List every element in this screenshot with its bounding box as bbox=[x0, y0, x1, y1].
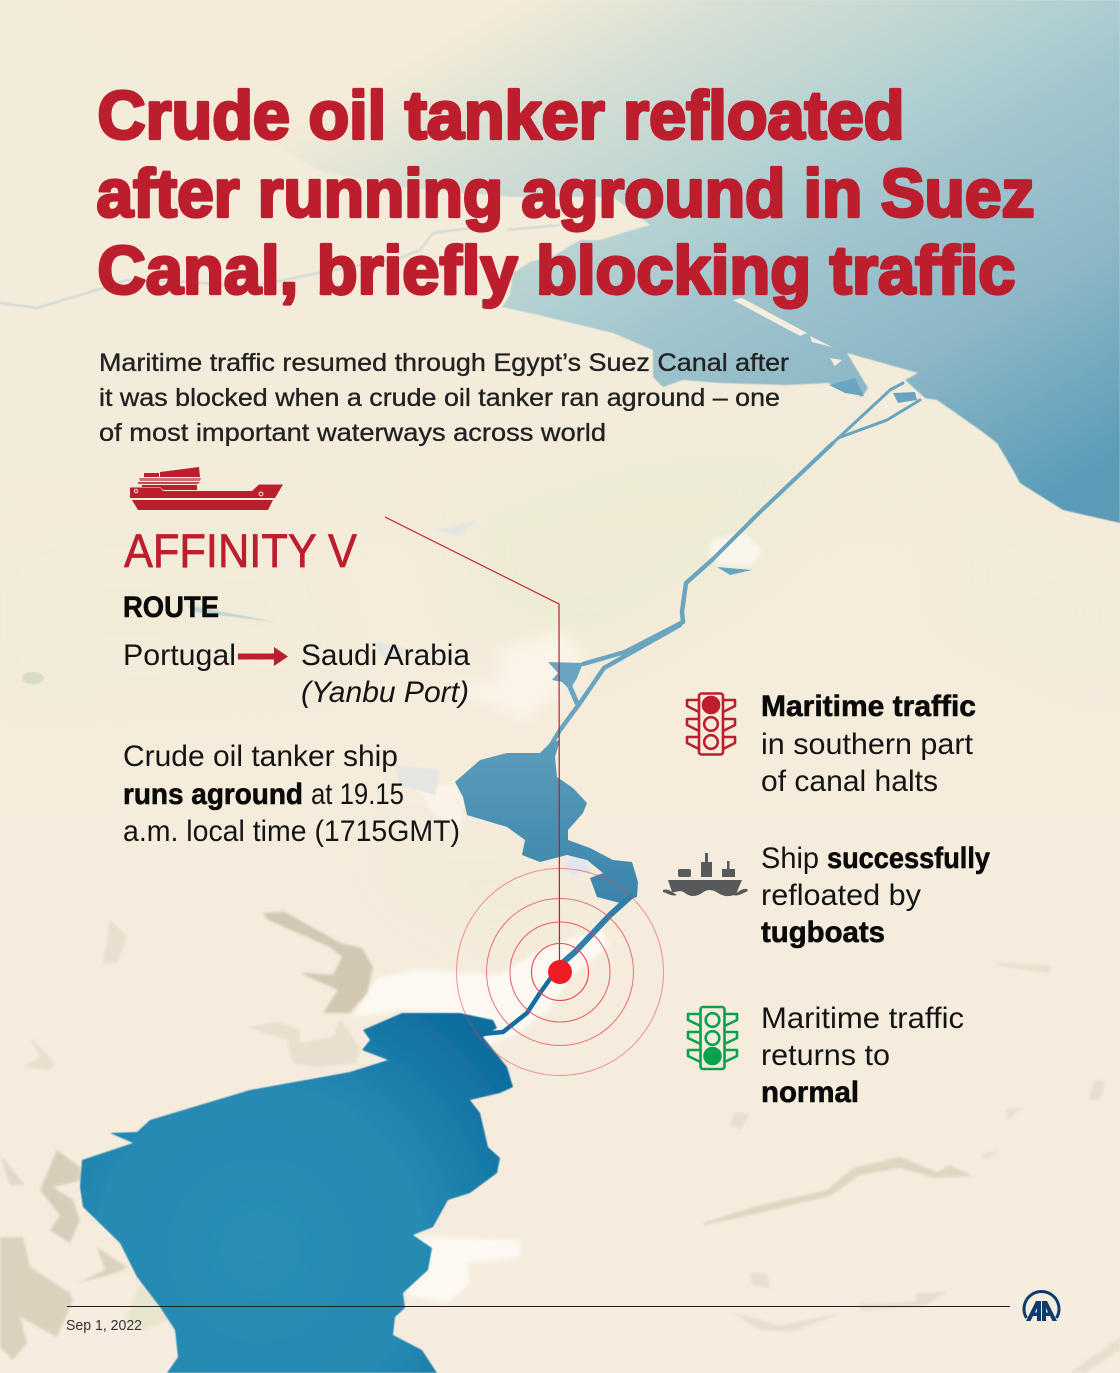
great bitter lake bbox=[455, 740, 638, 903]
red light text: of canal halts bbox=[761, 765, 938, 798]
green light text: normal bbox=[761, 1076, 859, 1109]
grounding description: runs aground bbox=[123, 778, 303, 811]
callout leader line bbox=[385, 517, 560, 972]
title: Crude oil tanker refloated bbox=[98, 78, 904, 154]
subtitle text: Maritime traffic resumed through Egypt’s Suez Canal after bbox=[99, 349, 789, 377]
red light text: Maritime traffic bbox=[761, 690, 976, 723]
inland lagoons bbox=[22, 520, 592, 875]
footer rule bbox=[67, 1306, 1010, 1307]
suez canal south section bbox=[482, 897, 630, 1034]
grounding description: a.m. local time (1715GMT) bbox=[123, 815, 460, 848]
refloated text: successfully bbox=[827, 842, 990, 875]
icon: crude oil tanker bbox=[130, 467, 283, 510]
subtitle text bbox=[99, 349, 789, 447]
nile delta branches bbox=[0, 225, 560, 308]
red light text: in southern part bbox=[761, 728, 974, 761]
subtitle text: it was blocked when a crude oil tanker ran aground – one bbox=[99, 384, 780, 412]
sandbar barrier bbox=[733, 298, 842, 366]
grounding description: Crude oil tanker ship bbox=[123, 740, 398, 773]
grounding description: at 19.15 bbox=[311, 778, 404, 811]
gulf of suez bbox=[80, 1013, 513, 1373]
title bbox=[96, 78, 1034, 308]
refloated text: tugboats bbox=[761, 916, 885, 949]
route: origin: Portugal bbox=[123, 639, 236, 672]
icon: tugboat bbox=[663, 853, 748, 896]
subtitle text: of most important waterways across world bbox=[99, 419, 606, 447]
title: Canal, briefly blocking traffic bbox=[98, 232, 1016, 308]
green light text: Maritime traffic bbox=[761, 1002, 964, 1035]
icon: red traffic light bbox=[687, 694, 735, 754]
icon: green traffic light bbox=[688, 1007, 737, 1069]
green light text: returns to bbox=[761, 1039, 890, 1072]
land: pale desert patches bbox=[353, 533, 762, 1303]
red light text bbox=[761, 690, 976, 798]
logo: Anadolu Agency bbox=[1024, 1291, 1059, 1321]
title: after running aground in Suez bbox=[96, 156, 1034, 232]
grounding description bbox=[123, 740, 460, 848]
route: destination bbox=[301, 639, 470, 709]
green light text bbox=[761, 1002, 964, 1109]
refloated text bbox=[761, 842, 990, 949]
land: green vegetation patches bbox=[0, 430, 1120, 960]
refloated text: Ship bbox=[761, 842, 819, 875]
mediterranean sea bbox=[60, 0, 1120, 523]
refloated text: refloated by bbox=[761, 879, 921, 912]
location marker with rings bbox=[385, 517, 664, 1076]
port basins bbox=[548, 378, 917, 690]
land: soft pale fields bbox=[440, 630, 590, 720]
suez canal north section bbox=[545, 383, 920, 755]
land: grey-brown relief east bbox=[703, 962, 1120, 1373]
ship name: AFFINITY V bbox=[124, 524, 358, 577]
arrow: route direction bbox=[238, 647, 288, 666]
land: grey-brown relief west bbox=[0, 912, 373, 1360]
grounding point bbox=[548, 960, 572, 984]
route heading: ROUTE bbox=[123, 591, 219, 624]
route: destination: Saudi Arabia bbox=[301, 639, 470, 672]
route: destination: (Yanbu Port) bbox=[301, 676, 469, 709]
date: Sep 1, 2022 bbox=[66, 1317, 142, 1334]
